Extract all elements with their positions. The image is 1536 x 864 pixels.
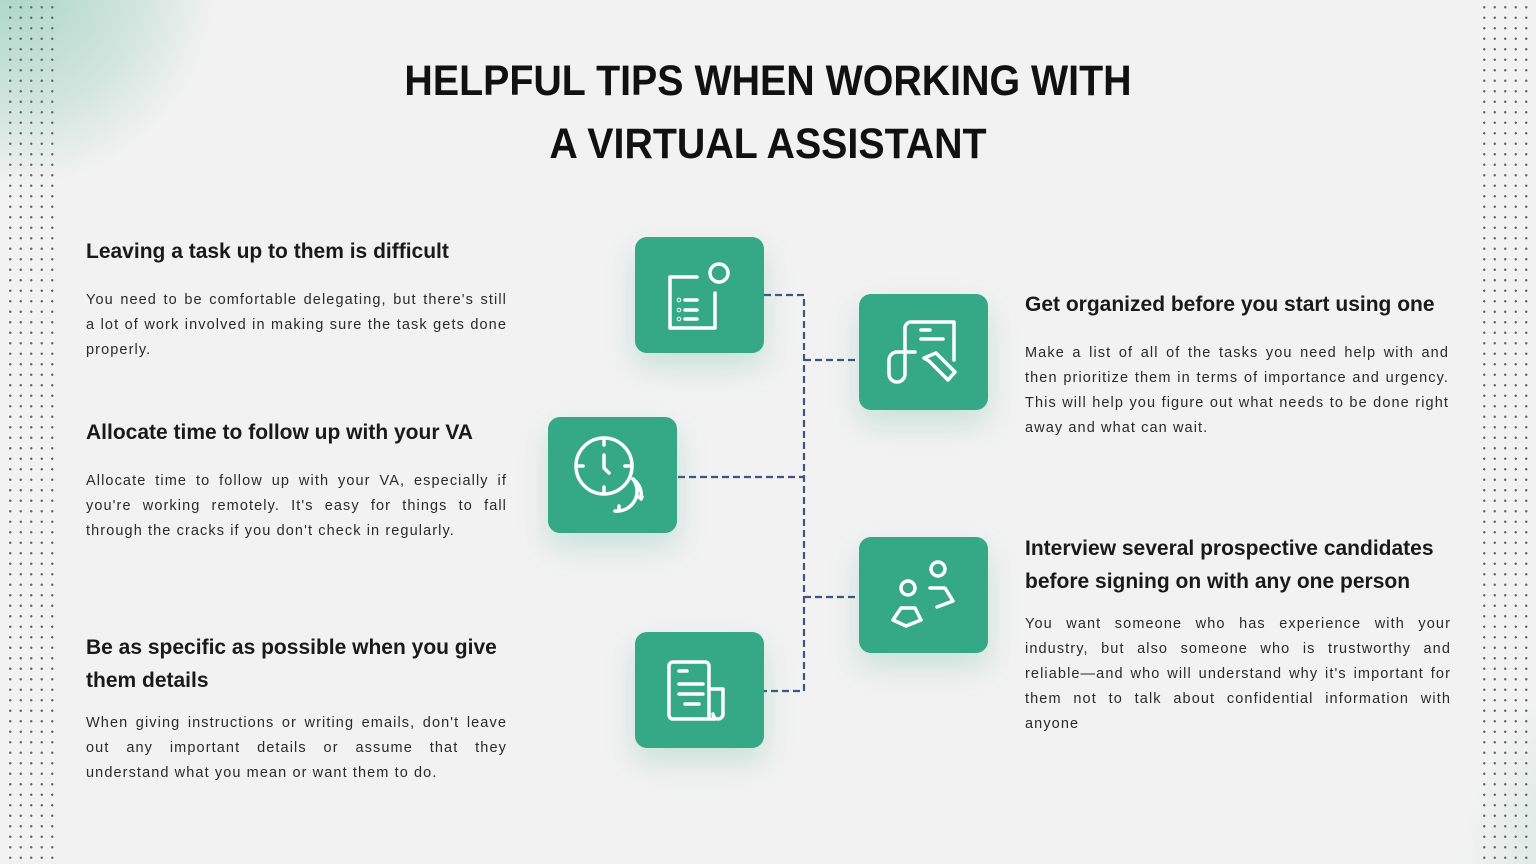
icon box: document	[635, 632, 764, 748]
text: interview: Interview several prospective candidates before signing on with any one person	[1025, 537, 1434, 593]
text: interview	[1025, 537, 1451, 732]
text: allocate time: Allocate time to follow up with your VA, especially if you're working remotely. It's easy for things to fall through the cracks if you don't check in regularly.	[86, 473, 507, 539]
text: get organized: Get organized before you start using one	[1025, 293, 1435, 316]
text: allocate time	[86, 421, 507, 539]
text: leaving a task	[86, 240, 507, 358]
title: A VIRTUAL ASSISTANT	[549, 120, 987, 168]
text: be specific	[86, 636, 507, 781]
text: be specific: When giving instructions or writing emails, don't leave out any important details or assume that they understand what you mean or want them to do.	[86, 715, 507, 781]
text: get organized	[1025, 293, 1449, 436]
text: be specific: Be as specific as possible when you give them details	[86, 636, 497, 692]
title: HELPFUL TIPS WHEN WORKING WITH	[404, 57, 1132, 105]
icon box: people	[859, 537, 988, 653]
text: allocate time: Allocate time to follow up with your VA	[86, 421, 473, 444]
text: get organized: Make a list of all of the tasks you need help with and then prioritize them in terms of importance and urgency. This will help you figure out what needs to be done right away and what can wait.	[1025, 345, 1449, 436]
icon box: clock	[548, 417, 677, 533]
text: interview: You want someone who has experience with your industry, but also someone who is trustworthy and reliable—and who will understand why it's important for them not to talk about confidential information with anyone	[1025, 616, 1451, 732]
title	[404, 57, 1132, 168]
text: leaving a task: Leaving a task up to them is difficult	[86, 240, 449, 263]
icon box: checklist	[635, 237, 764, 353]
icon box: docs and tag	[859, 294, 988, 410]
text: leaving a task: You need to be comfortable delegating, but there's still a lot of work involved in making sure the task gets done properly.	[86, 292, 507, 358]
